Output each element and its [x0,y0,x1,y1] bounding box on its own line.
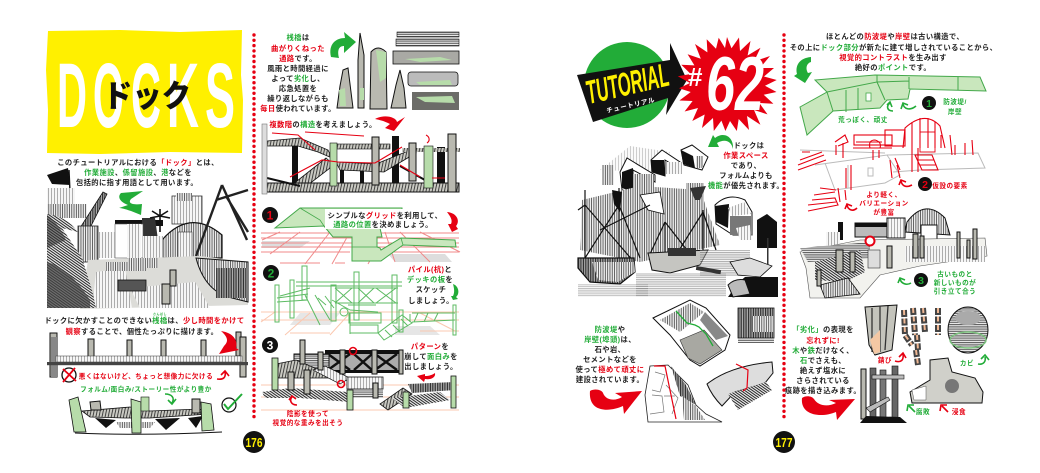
arrow: erosion [940,405,948,412]
callout 3: badge: 3 [918,275,924,287]
text: breakwaters: 防波堤や [595,325,625,334]
page number 177: 177 [776,435,792,450]
text: breakwaters [576,325,644,384]
detail: rusted chain [904,308,938,365]
right page divider dots [782,35,786,418]
step 2: text: しましょう。 [408,296,454,305]
arch building [162,223,222,258]
step 1: text: 通路の位置を決めましょう。 [333,220,433,229]
callout 1: label: 防波堤/ [943,97,967,106]
red life rings [350,348,356,354]
page number 176: 176 [246,435,262,450]
callout: lighter and varied [859,190,909,216]
arrow: red left [417,373,435,382]
label: mould: カビ [960,358,974,368]
green path [275,208,456,261]
step 3: badge [262,337,278,353]
grey shadow [290,313,340,325]
red temporary sketch [798,118,985,211]
arrow: green swoosh over scene [119,191,143,215]
step 2: text: デッキの板を [407,275,453,284]
arrow: rust [895,353,906,362]
step 2: badge: 2 [268,266,275,280]
text: contrast: その上にドック部分が新たに建て増しされていることから、 [790,43,997,52]
front deck [347,377,383,389]
illustration: harbour scene [578,145,778,297]
intro text [57,158,219,187]
text: contrast: 絶好のポイントです。 [855,63,931,72]
detail: rope coil [948,307,988,353]
text: contrast: 視覚的コントラストを生み出す [839,53,947,62]
arrow: mould [978,355,989,364]
life ring [866,236,874,246]
text: piers: ドックに欠かすことのできない桟橋は、少し時間をかけて [44,316,245,325]
badge: #62 burst [678,37,777,131]
text mask [325,209,447,229]
mid harbour [580,186,720,262]
arrow: green left [708,135,733,149]
label: erosion: 浸食 [952,407,966,416]
title DOCKS [57,45,235,147]
callout 1: label [943,97,967,116]
text: degradation: 石でさえも、 [800,356,846,365]
illustration: characterful pier [69,397,222,434]
masts and rigging [578,188,716,262]
dark columns [292,145,298,185]
text: work space: 機能が優先されます。 [708,181,784,190]
black shed [757,214,777,248]
ground [80,256,248,309]
posts [262,124,267,194]
step 2: text: スケッチ [416,285,446,294]
text: pier description: 風雨と時間経過に [267,64,329,73]
intro text: 作業施設、係留施設、港などを [84,168,192,177]
red elements [798,118,973,211]
callout: lighter and varied: バリエーション [859,200,909,208]
page number 176 [243,431,265,453]
text: pier description: 繰り返しながらも [267,94,329,103]
inked dock illustration [800,209,987,298]
text: pier description: 桟橋は [286,33,310,42]
callout: lighter and varied: が豊富 [873,208,895,216]
yellow title block [46,30,243,154]
callout 3: badge [914,273,928,287]
dock crane [80,192,107,228]
title panel: DOCKS: S [205,45,235,147]
text: pier description: 曲がりくねった [271,44,325,53]
callout 2: arrow [899,180,912,186]
number 62: 62 [706,42,764,127]
callout 2: badge: 2 [922,179,928,191]
arrow: red down [447,212,458,232]
arrow: green down [451,284,458,300]
main dock ground [800,238,987,298]
arrow: red pointing to pier [219,331,239,354]
title DOCKS: O [93,45,124,147]
arrow: red swoosh [375,116,405,131]
arrow: small red up [289,396,297,405]
callout 3: label: 新しいものが [934,278,976,287]
heading: multi level: 複数階の構造を考えましょう。 [269,120,377,129]
step 3: text: 出しましょう。 [404,362,458,371]
text: pier description: 応急処置を [279,84,317,93]
callout: lighter and varied: より軽く、 [866,190,902,199]
text: pier description [260,33,336,113]
text: degradation: 「劣化」の表現を [792,325,854,334]
illustration: concrete arch [707,362,773,410]
text: contrast: ほとんどの防波堤や岸壁は古い構造で、 [826,32,964,41]
pale grid [261,385,459,410]
moored boat [196,258,248,302]
callout 2: label: 仮設の要素 [932,181,968,190]
hash mark: # [688,62,703,92]
illustration: stone wall [645,365,722,422]
long house [855,223,887,237]
step 1: text [328,211,442,229]
page number 177 [773,431,795,453]
text: degradation: 痕跡を描き込みます。 [785,386,861,395]
shadow below [95,416,203,430]
title panel: DOCKS [46,30,243,154]
text: degradation: さらされている [796,376,850,385]
text: pier description: よって劣化し、 [271,74,325,83]
pipe and black corner [728,277,778,297]
small boats [730,258,772,277]
crane hook [47,168,70,185]
white building [115,224,143,258]
text: piers: 観察することで、個性たっぷりに描けます。 [66,327,218,336]
step 3: text [404,342,458,371]
text: breakwaters: 建設されています。 [576,375,644,384]
text: piers: さんばし [153,311,167,316]
title DOCKS: C [131,45,161,147]
text: degradation: 忘れずに! [806,336,840,345]
callout 1: wall arrows [887,102,916,111]
illustration: wood posts [337,33,406,109]
title ドック: ドック [103,79,191,114]
step 1: badge: 1 [267,208,274,222]
text: breakwaters: 石や岩、 [595,345,625,354]
palm tree [150,209,170,232]
text: work space: ドックは [734,141,765,150]
caption: lacking imagination: 悪くはないけど、ちょっと想像力に欠ける [79,372,213,380]
arrow: green curved [330,32,356,58]
icon: check [222,394,242,412]
detail: rotten fence [860,366,907,423]
deck [82,407,208,418]
round hall [905,209,950,235]
illustration: dock scene [47,168,248,309]
label: rot: 腐敗 [916,407,930,416]
grey shadows [262,241,310,248]
step 2: text: パイル(杭)と [408,265,452,274]
text: breakwaters: 岸壁(埠頭)は、 [584,335,636,344]
posts [272,358,278,390]
callout 3: arrow [898,278,911,284]
red guide lines [272,132,445,178]
text: degradation [785,325,861,395]
callout 1: badge [922,96,936,110]
black arrow [577,43,687,122]
step 3: badge: 3 [267,338,274,352]
tutorial badge [577,42,687,128]
decks [267,138,332,158]
green circle [584,42,670,128]
illustration: plain pier [47,332,248,377]
text: work space: 作業スペース [723,151,769,160]
detail: rusted plates [865,305,897,355]
callout 2: badge [918,177,932,191]
back building [172,196,202,224]
illustration: stone breakwater [653,300,730,366]
step 1: grid drawing [261,208,460,264]
intro text: 包括的に指す用語として用います。 [76,178,198,187]
illustration: window detail [738,308,774,343]
step 2: green sketch [261,266,459,340]
text: pier description: 毎日使われています。 [260,104,336,113]
pale grid [261,312,459,335]
railing with braces [325,350,400,354]
intro text: このチュートリアルにおける「ドック」とは、 [57,158,219,167]
arrow: big red [590,390,642,414]
arrow: green down-left [794,57,812,83]
tutorial katakana: チュートリアル [606,96,656,115]
text: piers [44,311,245,336]
caption: richer form: フォルム/面白み/ストーリー性がより豊か [80,384,212,394]
icon: cross [62,368,76,382]
text: work space [708,141,784,190]
sketch lines [275,266,456,340]
step 2: text [407,265,454,305]
step 1: badge [262,207,278,223]
text: breakwaters: セメントなどを [583,355,637,364]
left page divider dots [252,35,256,418]
text: degradation: 木や鉄だけなく、 [792,346,854,355]
arrow: small red [217,371,229,379]
title DOCKS: K [167,45,199,147]
tutorial label: TUTORIAL [582,56,672,111]
title DOCKS: D [57,45,87,147]
callout: rough and sturdy: 荒っぽく、頑丈 [838,115,888,124]
workshop with round roof [715,197,752,235]
left palm mass [47,214,96,308]
text: breakwaters: 使って極めて頑丈に [576,365,644,374]
text: contrast [790,32,997,72]
water lines [636,273,726,297]
callout 1: label: 岸壁 [948,107,962,116]
left ship [578,258,635,284]
step 3: caption [273,409,343,427]
step 3: text: 崩して面白みを [404,352,458,361]
text: work space: フォルムよりも [719,171,773,180]
A-frame crane [196,185,248,256]
step 1: text: シンプルなグリッドを利用して、 [328,211,442,220]
distant houses [600,146,670,172]
text: degradation: 絶えず塩水に [800,366,846,375]
detail: eroded rock [910,358,983,403]
water shadows [262,388,350,402]
text: work space: であり、 [731,161,761,170]
callout 3: label: 引き立て合う [934,286,976,296]
illustration: wood planks [393,32,459,110]
callout 3: label [934,270,976,296]
middle ship [648,250,708,273]
step 3: inked dock [261,340,459,410]
houses [620,158,655,192]
arrow: small green [165,394,176,404]
central boxes [118,280,146,291]
perspective grid [261,232,460,264]
arrow: big red [802,396,855,420]
text: pier description: 通路です。 [279,54,317,63]
arrow: rot [907,405,915,412]
illustration: multi-level dock [262,124,460,194]
pier deck [56,356,242,362]
arrow: small red [845,204,857,210]
callout 3: label: 古いものと [937,270,973,278]
step 3: caption: 陰影を使って [287,409,329,418]
grey wall [800,150,985,190]
step 3: caption: 視覚的な重みを出そう [273,418,343,427]
label: rust: 錆び [878,356,892,364]
dock posts [836,250,843,272]
mossy posts [69,397,86,432]
step 2: badge [263,265,279,281]
red burst [678,37,777,131]
pier posts [50,333,57,377]
step 3: text: パターンを [411,342,449,351]
callout 1: badge: 1 [926,98,932,110]
green wall sketch [800,75,986,135]
deck left [294,354,329,370]
